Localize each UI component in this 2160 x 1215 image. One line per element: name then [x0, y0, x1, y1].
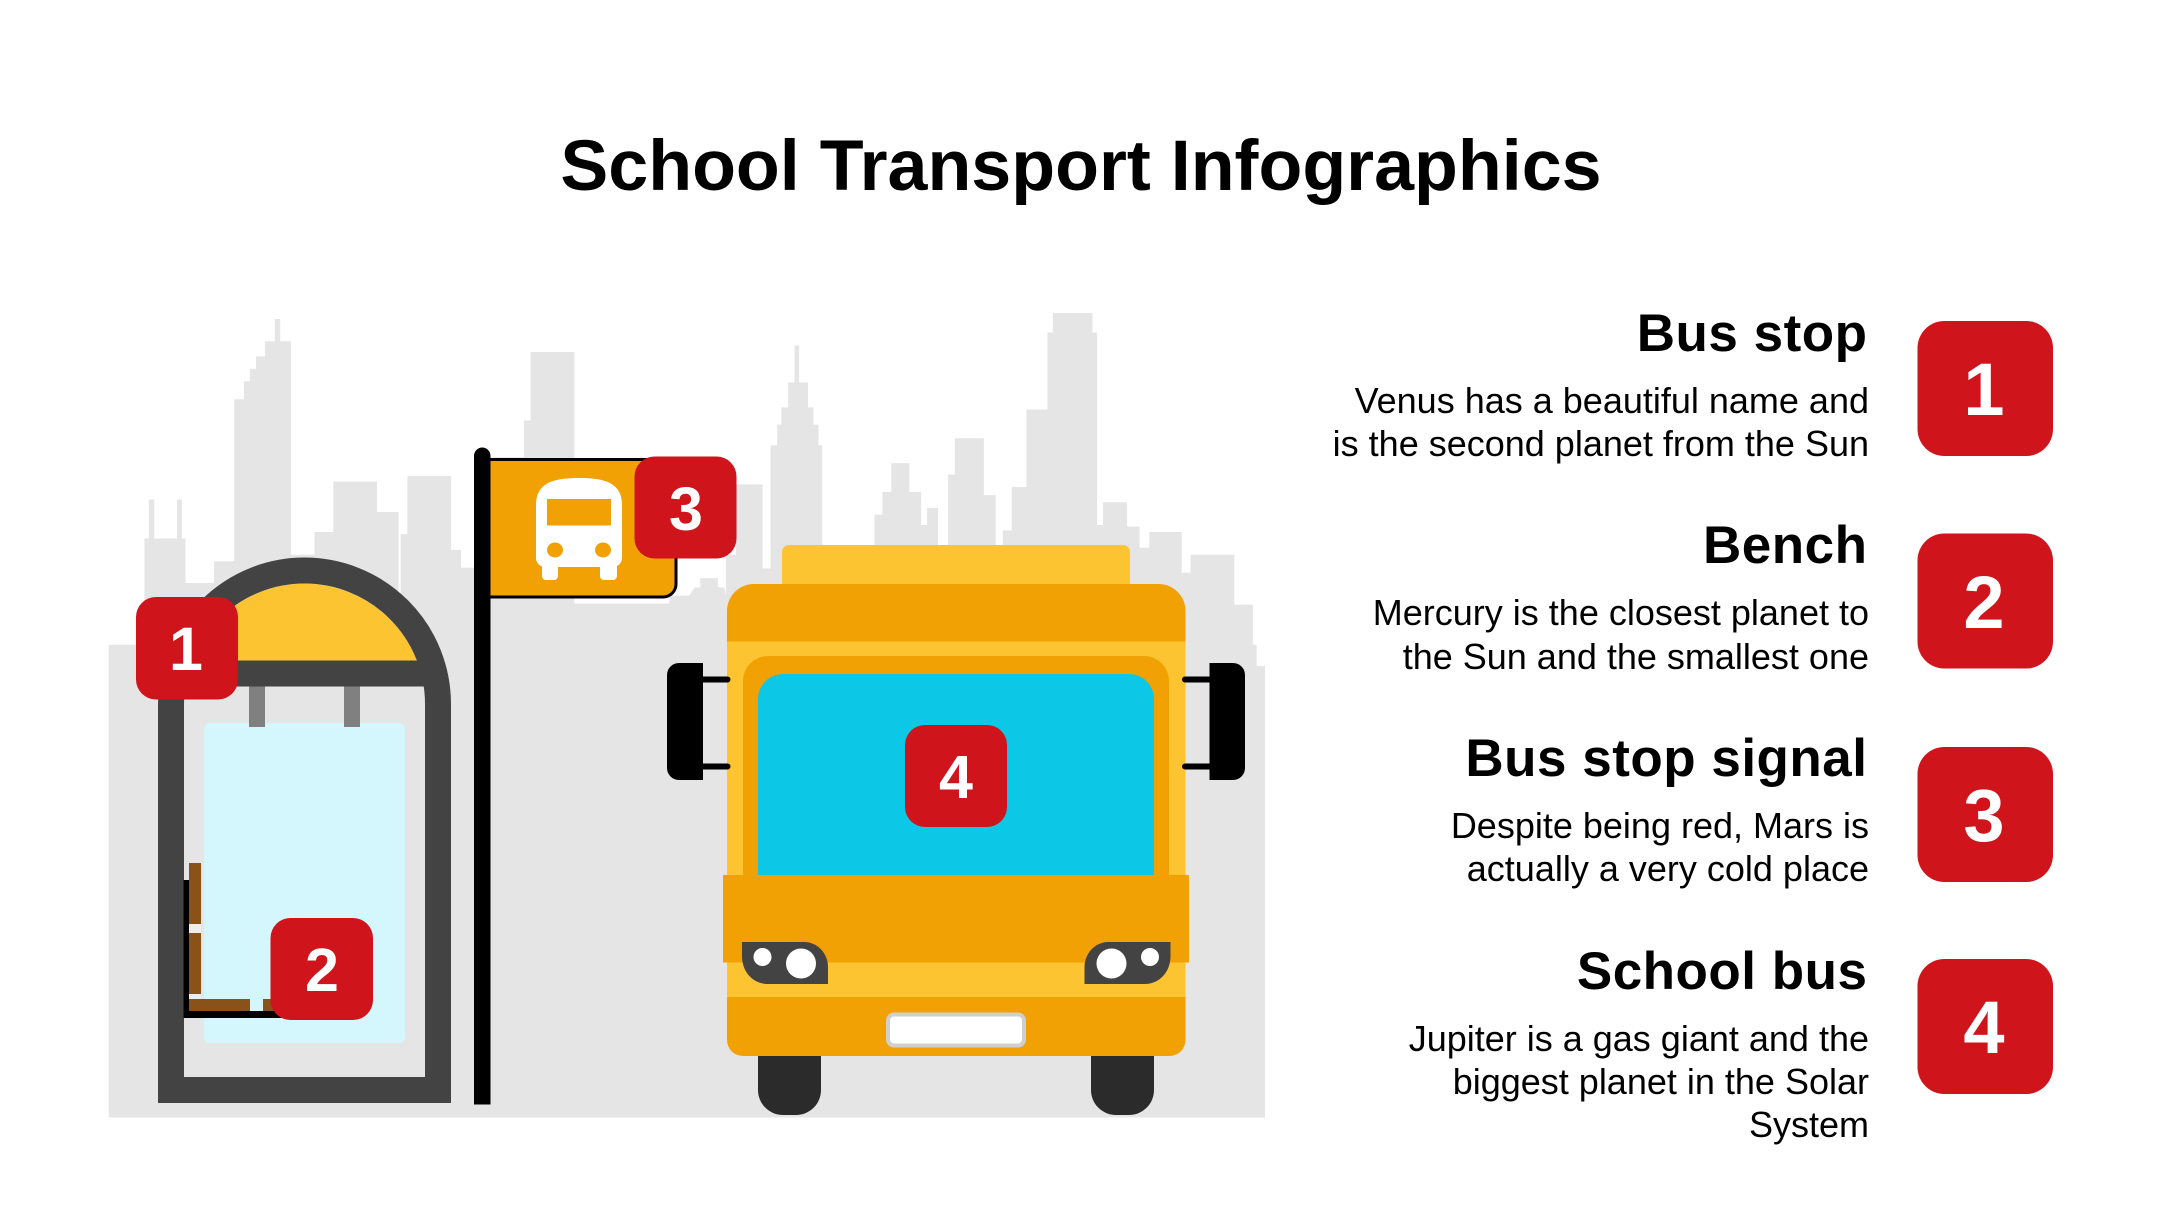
description: biggest planet in the Solar: [1453, 1061, 1869, 1102]
bus shelter: [171, 571, 438, 1090]
body top: [727, 584, 1186, 642]
marker 4: [905, 725, 1007, 827]
icon: bus: [536, 478, 622, 580]
heading: Bench: [1703, 516, 1868, 575]
city skyline background: [109, 313, 1265, 1117]
item: school bus: 4: [1963, 986, 2005, 1069]
title: School Transport Infographics: [560, 126, 1602, 206]
headlights: [742, 942, 1170, 984]
shelter hangers: [249, 686, 360, 727]
marker 2: 2: [305, 936, 339, 1004]
number badge: [1918, 534, 2053, 668]
marker 4: 4: [939, 743, 973, 811]
description: System: [1749, 1104, 1869, 1145]
wheels: [758, 1050, 1154, 1115]
description: Jupiter is a gas giant and the: [1409, 1018, 1869, 1059]
description: is the second planet from the Sun: [1333, 423, 1869, 464]
item: bus stop signal: [1451, 729, 2053, 889]
shelter frame: [171, 571, 438, 1090]
body middle: [727, 630, 1186, 1010]
item: school bus: [1409, 942, 2053, 1145]
number badge: [1918, 747, 2053, 882]
heading: Bus stop: [1637, 304, 1868, 363]
marker 2: [270, 918, 373, 1020]
item: bench: 2: [1963, 561, 2005, 644]
description: Despite being red, Mars is: [1451, 805, 1869, 846]
description: actually a very cold place: [1467, 848, 1869, 889]
heading: School bus: [1577, 942, 1868, 1001]
number badge: [1918, 321, 2053, 456]
heading: Bus stop signal: [1465, 729, 1868, 788]
marker 1: 1: [169, 615, 203, 683]
description: Venus has a beautiful name and: [1355, 380, 1869, 421]
windshield frame: [743, 656, 1169, 880]
marker 3: 3: [669, 475, 703, 543]
item: bus stop signal: 3: [1963, 774, 2005, 857]
sign plate: [488, 460, 676, 597]
item: bench: [1373, 516, 2053, 677]
sign pole: [474, 448, 490, 1104]
description: the Sun and the smallest one: [1403, 636, 1869, 677]
number badge: [1918, 959, 2053, 1094]
marker 1: [136, 597, 238, 700]
mirrors: [667, 663, 1245, 780]
bus stop signal: [474, 448, 676, 1104]
marker 3: [634, 456, 736, 558]
lower band: [723, 875, 1189, 962]
roof unit: [782, 545, 1130, 590]
shelter roof dome: [192, 584, 417, 661]
item: bus stop: [1333, 304, 2053, 464]
bench: [184, 863, 313, 1018]
school bus: [667, 545, 1245, 1115]
license plate: [888, 1014, 1024, 1046]
item: bus stop: 1: [1963, 348, 2005, 431]
shelter glass panel: [204, 723, 405, 1043]
bumper: [727, 997, 1186, 1056]
description: Mercury is the closest planet to: [1373, 592, 1869, 633]
windshield: [758, 674, 1154, 880]
